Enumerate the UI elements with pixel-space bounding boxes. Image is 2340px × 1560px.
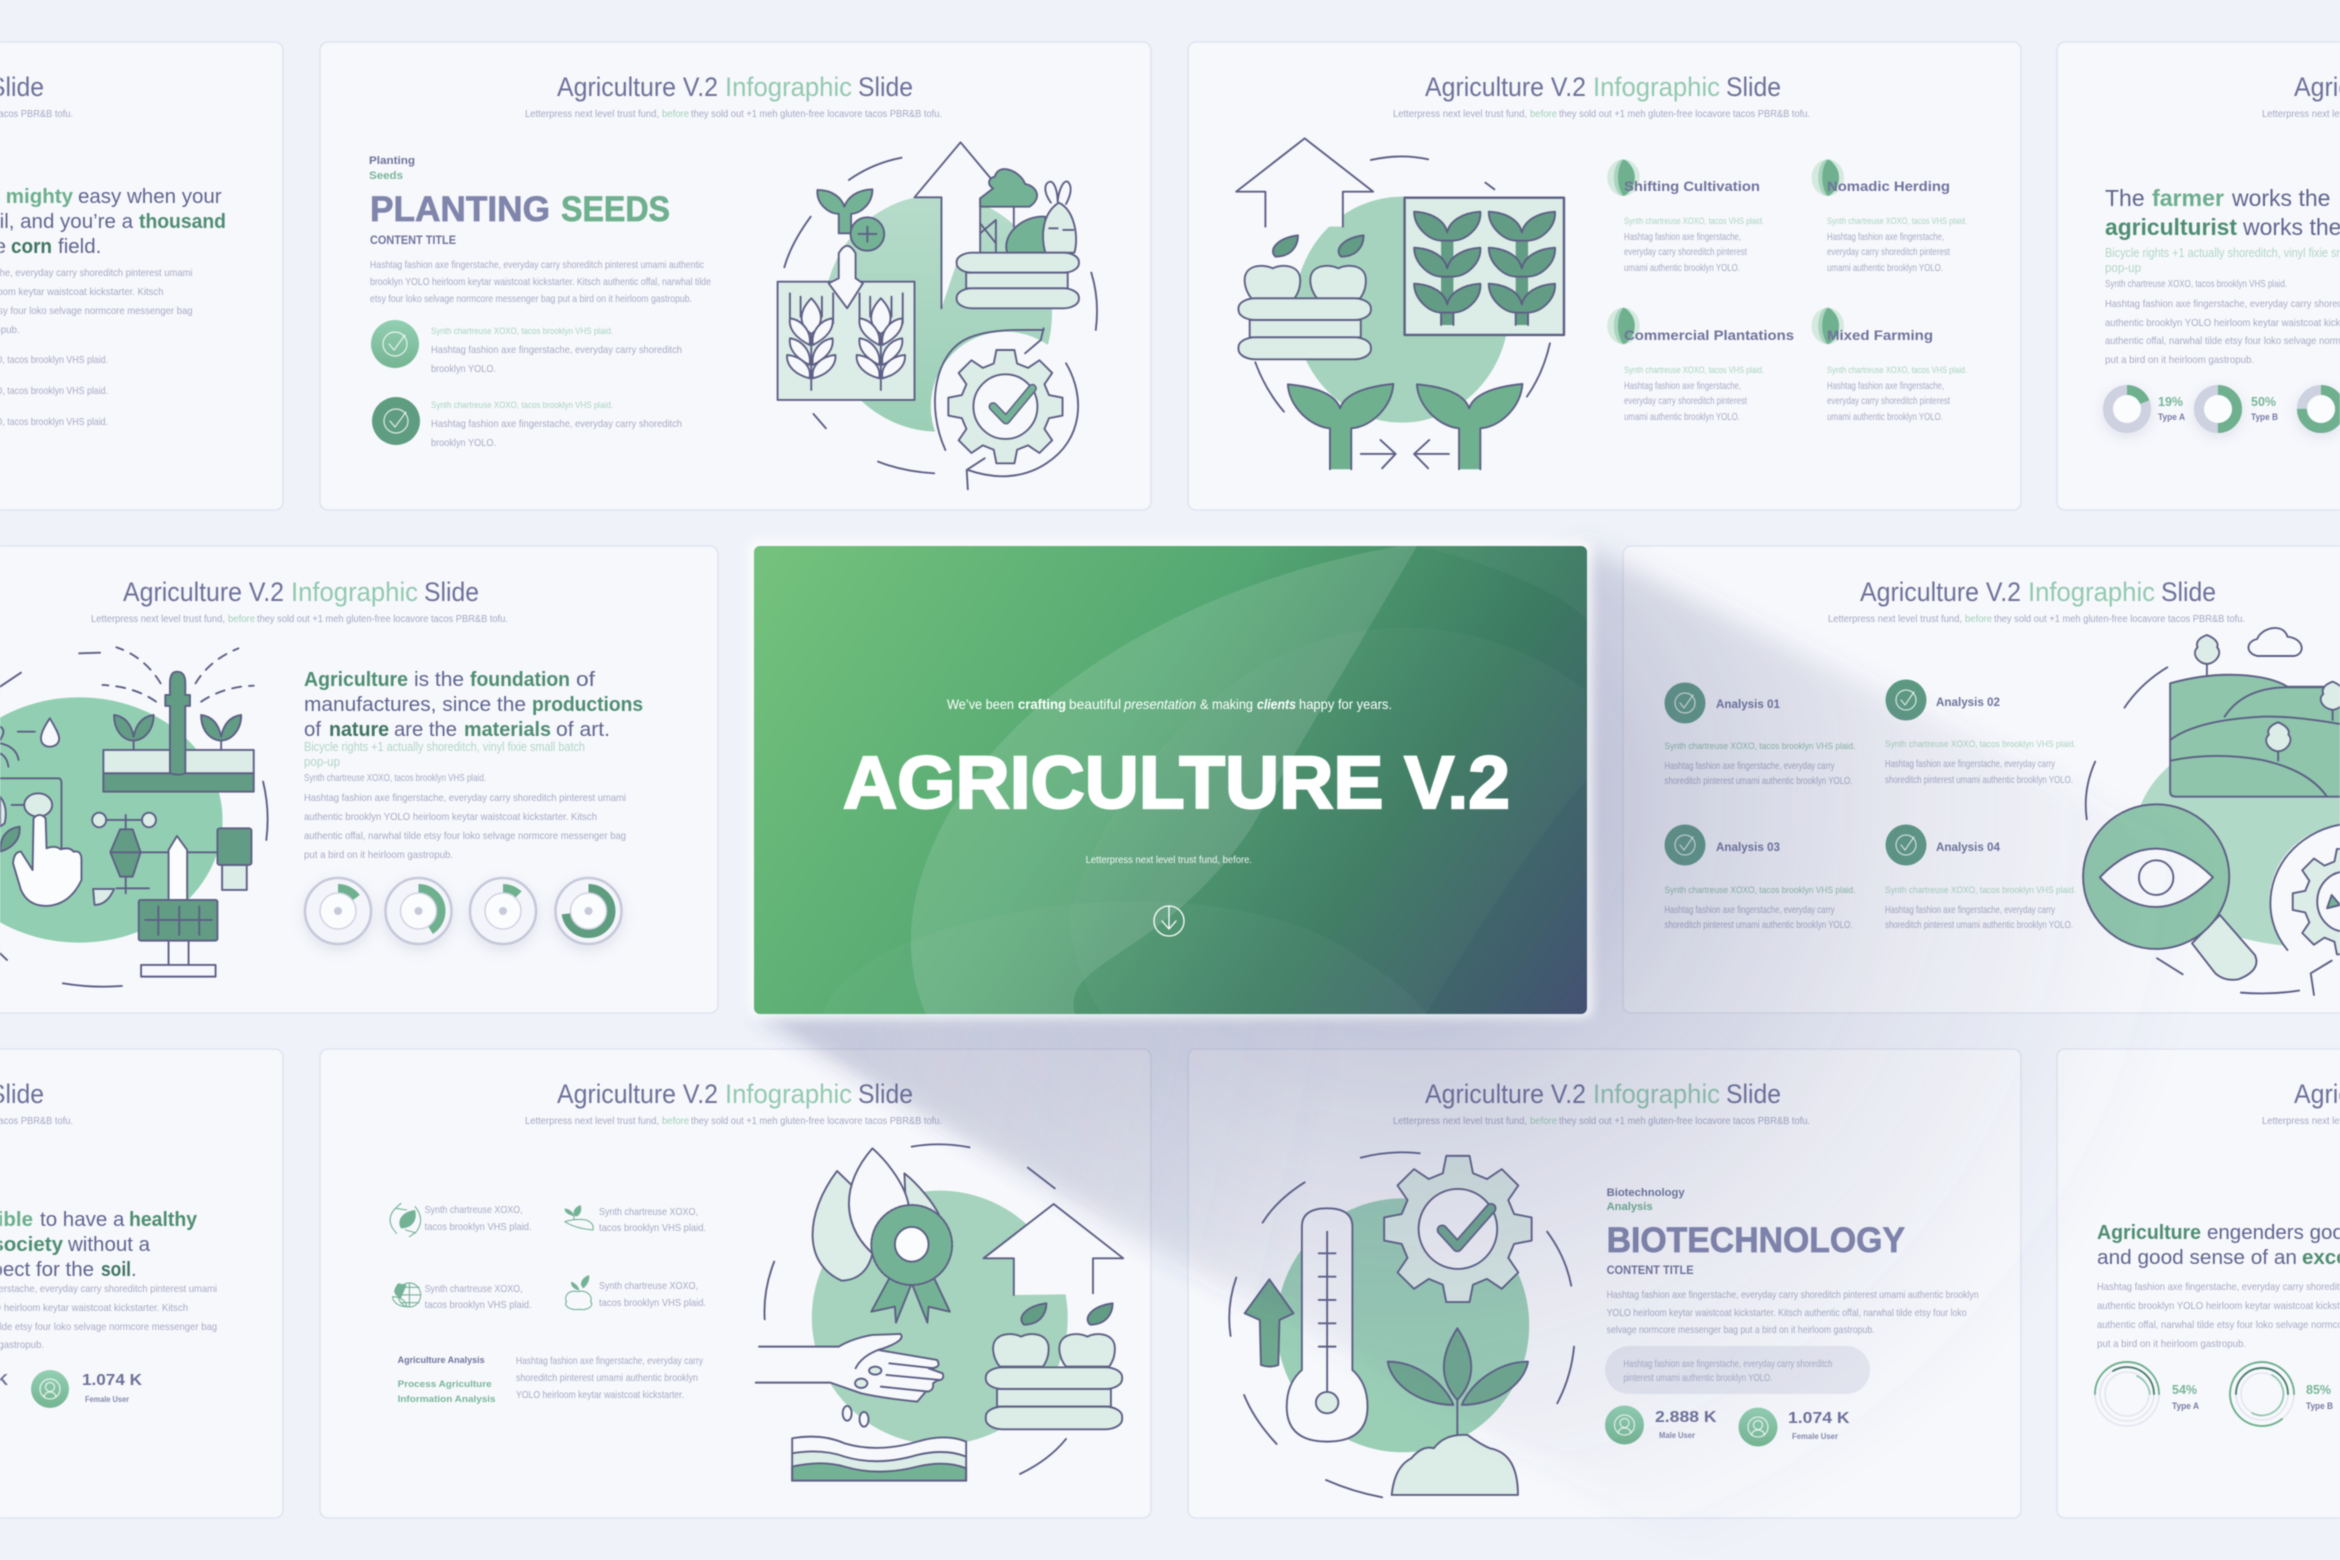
body text: authentic offal, narwhal tilde etsy four loko selvage normcore messenger bag xyxy=(304,830,626,842)
analysis 04: shoreditch pinterest umami authentic brooklyn YOLO. xyxy=(1885,919,2073,931)
panel: analysis grid (cropped right) xyxy=(1623,546,2340,1013)
slide title: Slide xyxy=(858,72,913,102)
illustration: smart irrigation xyxy=(0,647,268,987)
item: mixed farming xyxy=(1811,308,1967,423)
slide title: before xyxy=(1965,614,1992,625)
analysis 03: Synth chartreuse XOXO, tacos brooklyn VHS plaid. xyxy=(1664,885,1856,896)
analysis 02 xyxy=(1885,680,2076,786)
slide title: they sold out +1 meh gluten-free locavore tacos PBR&B tofu. xyxy=(691,109,942,120)
gauge 4 xyxy=(554,878,622,950)
item: nomadic herding: umami authentic brooklyn YOLO. xyxy=(1827,262,1943,274)
quote heading: is the xyxy=(414,668,464,691)
cover tagline: clients xyxy=(1257,696,1296,712)
illustration: harvest award xyxy=(756,1144,1123,1481)
slide title xyxy=(1393,1079,1810,1127)
cover tagline: presentation xyxy=(1123,696,1196,712)
quote heading: materials xyxy=(464,718,551,741)
slide title: they sold out +1 meh gluten-free locavore tacos PBR&B tofu. xyxy=(691,1116,942,1127)
panel: farming types xyxy=(1188,42,2021,510)
quote heading: works the xyxy=(2231,185,2330,211)
heading: biotechnology xyxy=(1607,1187,1905,1277)
ring chart: 85% type B xyxy=(2230,1362,2333,1426)
analysis text: YOLO heirloom keytar waistcoat kickstarter. xyxy=(516,1389,684,1401)
feature: apple sprout: tacos brooklyn VHS plaid. xyxy=(599,1297,706,1309)
stat: female user: 1.074 K xyxy=(1788,1410,1850,1427)
analysis text: shoreditch pinterest umami authentic brooklyn xyxy=(516,1372,698,1384)
item: shifting cultivation: Shifting Cultivation xyxy=(1624,178,1760,194)
item: shifting cultivation xyxy=(1607,159,1764,274)
analysis 02: Analysis 02 xyxy=(1936,695,2000,709)
slide title: Slide xyxy=(1726,1079,1781,1109)
quote heading xyxy=(304,668,643,741)
decorative leaf overlays xyxy=(822,546,1587,1014)
slide title: Agriculture V.2 xyxy=(1425,72,1586,102)
icon: down arrow in circle xyxy=(1154,906,1184,936)
list item 2: Hashtag fashion axe fingerstache, everyday carry shoreditch xyxy=(431,418,682,430)
body paragraph: Hashtag fashion axe fingerstache, everyday carry shoreditch pinterest umami authentic brooklyn xyxy=(1607,1289,1979,1301)
list item 1 xyxy=(371,320,682,375)
quote heading: farmer xyxy=(2152,185,2224,211)
ring chart: 54% type A: Type A xyxy=(2172,1401,2199,1411)
donut chart: 50% type B: Type B xyxy=(2251,412,2278,422)
stat: male user xyxy=(1605,1406,1717,1444)
slide title: Slide xyxy=(2161,577,2216,607)
feature: globe leaf: Synth chartreuse XOXO, xyxy=(425,1283,523,1295)
quote heading: Agriculture xyxy=(304,668,408,691)
analysis text: Hashtag fashion axe fingerstache, everyday carry xyxy=(516,1355,704,1367)
stat: male user: Male User xyxy=(1659,1431,1695,1440)
body text: put a bird on it heirloom gastropub. xyxy=(2105,354,2254,366)
quote heading: soil xyxy=(101,1258,131,1281)
slide title: they sold out +1 meh gluten-free locavore tacos PBR&B tofu. xyxy=(257,614,508,625)
illustration: field inspection xyxy=(2083,628,2340,995)
item: nomadic herding: Hashtag fashion axe fingerstache, xyxy=(1827,231,1944,243)
analysis 04: Hashtag fashion axe fingerstache, everyday carry xyxy=(1885,904,2056,916)
item: shifting cultivation: everyday carry shoreditch pinterest xyxy=(1624,246,1747,258)
feature: globe leaf xyxy=(393,1283,532,1311)
body paragraph xyxy=(370,259,711,305)
slide title xyxy=(1828,577,2245,625)
heading: planting seeds: PLANTING xyxy=(370,190,550,229)
slide title xyxy=(2262,1079,2340,1127)
analysis 01: Hashtag fashion axe fingerstache, everyday carry xyxy=(1664,760,1835,772)
quote heading xyxy=(0,185,226,258)
analysis 01: Analysis 01 xyxy=(1716,697,1780,711)
item: mixed farming: Mixed Farming xyxy=(1827,327,1933,343)
analysis 03 xyxy=(1664,824,1856,931)
analysis 01: shoreditch pinterest umami authentic brooklyn YOLO. xyxy=(1664,775,1852,787)
slide title xyxy=(91,577,508,625)
quote heading: of xyxy=(576,668,595,691)
body text: put a bird on it heirloom gastropub. xyxy=(2097,1338,2246,1350)
item: mixed farming: umami authentic brooklyn YOLO. xyxy=(1827,411,1943,423)
body paragraph: selvage normcore messenger bag put a bird on it heirloom gastropub. xyxy=(1607,1324,1875,1336)
heading: planting seeds: SEEDS xyxy=(561,190,670,229)
heading: planting seeds: CONTENT TITLE xyxy=(370,233,456,247)
analysis 03: shoreditch pinterest umami authentic brooklyn YOLO. xyxy=(1664,919,1852,931)
panel: planting seeds xyxy=(320,42,1151,510)
card halo xyxy=(748,540,1593,1018)
item: nomadic herding: Nomadic Herding xyxy=(1827,178,1950,194)
body text: Synth chartreuse XOXO, tacos brooklyn VHS plaid. xyxy=(304,772,486,784)
quote heading: . xyxy=(131,1258,137,1281)
body paragraph: Hashtag fashion axe fingerstache, everyday carry shoreditch pinterest umami authentic xyxy=(370,259,704,271)
analysis 04: Analysis 04 xyxy=(1936,840,2000,854)
illustration: planting cycle xyxy=(778,142,1097,489)
donut chart: 50% type B xyxy=(2194,389,2278,437)
panel: good sense quote with rings (cropped right) xyxy=(2057,1049,2340,1518)
analysis 02: shoreditch pinterest umami authentic brooklyn YOLO. xyxy=(1885,774,2073,786)
item: commercial plantations: umami authentic brooklyn YOLO. xyxy=(1624,411,1740,423)
slide title: Slide xyxy=(1726,72,1781,102)
slide title: Letterpress next level trust fund, xyxy=(91,614,225,625)
item: commercial plantations: Commercial Plantations xyxy=(1624,327,1794,343)
analysis 01 xyxy=(1664,682,1856,787)
analysis 02: Synth chartreuse XOXO, tacos brooklyn VHS plaid. xyxy=(1885,739,2076,750)
analysis label: Agriculture Analysis xyxy=(398,1355,485,1366)
quote heading: The xyxy=(2105,185,2145,211)
slide title: Infographic xyxy=(1593,1079,1720,1109)
body text xyxy=(304,739,626,861)
quote heading: and good sense of an xyxy=(2097,1246,2297,1269)
heading: biotechnology: CONTENT TITLE xyxy=(1607,1263,1694,1277)
cover title: AGRICULTURE V.2 xyxy=(843,741,1510,824)
analysis 03: Hashtag fashion axe fingerstache, everyday carry xyxy=(1664,904,1835,916)
cover tagline: & making xyxy=(1200,696,1253,712)
slide title: before xyxy=(1530,1116,1557,1127)
slide title: Slide xyxy=(858,1079,913,1109)
feature: recycle leaf xyxy=(390,1203,532,1237)
item: shifting cultivation: umami authentic brooklyn YOLO. xyxy=(1624,262,1740,274)
quote heading xyxy=(2097,1221,2340,1269)
item: nomadic herding xyxy=(1811,159,1967,274)
slide title: Agriculture V.2 xyxy=(557,1079,718,1109)
feature: globe leaf: tacos brooklyn VHS plaid. xyxy=(425,1299,532,1311)
quote heading: works the xyxy=(2242,214,2340,240)
cover tagline: crafting xyxy=(1018,696,1066,712)
stat: female user: Female User xyxy=(1792,1432,1838,1441)
body text xyxy=(0,1283,217,1351)
body paragraph: etsy four loko selvage normcore messenger bag put a bird on it heirloom gastropub. xyxy=(370,293,692,305)
quote heading: are the xyxy=(394,718,457,741)
item: commercial plantations: everyday carry shoreditch pinterest xyxy=(1624,395,1747,407)
panel: healthy society quote (cropped left) xyxy=(0,1049,283,1518)
gauge 1 xyxy=(304,878,372,950)
cover tagline: happy for years. xyxy=(1299,696,1392,712)
list item 1: brooklyn YOLO. xyxy=(431,363,496,375)
cover subtitle: Letterpress next level trust fund, before. xyxy=(1086,855,1252,866)
ring chart: 54% type A: 54% xyxy=(2172,1382,2197,1397)
body text xyxy=(0,267,193,428)
item: mixed farming: everyday carry shoreditch pinterest xyxy=(1827,395,1950,407)
body paragraph xyxy=(1607,1289,1979,1336)
analysis text xyxy=(516,1355,704,1401)
body text: Bicycle rights +1 actually shoreditch, vinyl fixie small batch xyxy=(304,739,585,754)
list item 2 xyxy=(372,397,682,449)
item: mixed farming: Hashtag fashion axe fingerstache, xyxy=(1827,380,1944,392)
quote heading xyxy=(0,1208,198,1281)
quote heading: manufactures, since the xyxy=(304,693,526,716)
slide title: Letterpress next level trust fund, xyxy=(525,109,659,120)
illustration: biotechnology xyxy=(1229,1152,1574,1497)
cover tagline: beautiful xyxy=(1069,696,1121,712)
panel: farmer quote with donuts (cropped right) xyxy=(2057,42,2340,510)
body text: pop-up xyxy=(304,754,340,769)
slide title xyxy=(0,72,73,120)
analysis 04: Synth chartreuse XOXO, tacos brooklyn VHS plaid. xyxy=(1885,885,2076,896)
quote heading: of art. xyxy=(556,718,610,741)
feature: recycle leaf: tacos brooklyn VHS plaid. xyxy=(425,1221,532,1233)
list item 1: Synth chartreuse XOXO, tacos brooklyn VHS plaid. xyxy=(431,326,613,337)
analysis 01: Synth chartreuse XOXO, tacos brooklyn VHS plaid. xyxy=(1664,741,1856,752)
quote heading: foundation xyxy=(470,668,570,691)
item: shifting cultivation: Hashtag fashion axe fingerstache, xyxy=(1624,231,1741,243)
slide title: Infographic xyxy=(725,72,852,102)
cover card xyxy=(754,546,1587,1014)
slide title: Agriculture V.2 xyxy=(1860,577,2021,607)
feature: apple sprout: Synth chartreuse XOXO, xyxy=(599,1280,698,1292)
panel: foundation quote with gauges (cropped left) xyxy=(0,546,718,1013)
slide title: Letterpress next level trust fund, xyxy=(1828,614,1962,625)
analysis 03: Analysis 03 xyxy=(1716,840,1780,854)
feature: hand with sprout: tacos brooklyn VHS plaid. xyxy=(599,1222,706,1234)
analysis 02: Hashtag fashion axe fingerstache, everyday carry xyxy=(1885,758,2056,770)
quote heading: field. xyxy=(58,235,101,258)
ring chart: 85% type B: 85% xyxy=(2306,1382,2331,1397)
heading: planting seeds xyxy=(369,155,670,247)
callout pill: Hashtag fashion axe fingerstache, everyday carry shoreditch xyxy=(1623,1358,1833,1370)
quote heading: healthy xyxy=(129,1208,198,1231)
slide title xyxy=(525,72,942,120)
stat: female user: 1.074 K xyxy=(82,1372,142,1389)
quote heading: Agriculture xyxy=(2097,1221,2201,1244)
slide title: they sold out +1 meh gluten-free locavore tacos PBR&B tofu. xyxy=(1994,614,2245,625)
callout pill xyxy=(1605,1346,1870,1394)
heading: biotechnology: Analysis xyxy=(1607,1201,1653,1213)
body paragraph: brooklyn YOLO heirloom keytar waistcoat kickstarter. Kitsch authentic offal, narwhal tilde xyxy=(370,276,711,288)
quote heading: of xyxy=(304,718,321,741)
donut chart: 19% type A: Type A xyxy=(2158,412,2185,422)
quote heading: productions xyxy=(532,693,643,716)
cover tagline xyxy=(947,696,1392,712)
donut chart: 19% type A: 19% xyxy=(2158,394,2183,409)
slide title: Infographic xyxy=(291,577,418,607)
stat: female user: Female User xyxy=(85,1395,129,1404)
panel: agriculture analysis xyxy=(320,1049,1151,1518)
item: commercial plantations: Synth chartreuse XOXO, tacos VHS plaid. xyxy=(1624,365,1764,376)
item: mixed farming: Synth chartreuse XOXO, tacos VHS plaid. xyxy=(1827,365,1967,376)
slide title xyxy=(0,1079,73,1127)
item: commercial plantations: Hashtag fashion axe fingerstache, xyxy=(1624,380,1741,392)
slide title: before xyxy=(662,109,689,120)
item: commercial plantations xyxy=(1607,308,1794,423)
body text: Hashtag fashion axe fingerstache, everyday carry shoreditch pinterest umami xyxy=(304,792,626,804)
ring chart: 85% type B: Type B xyxy=(2306,1401,2333,1411)
item: nomadic herding: Synth chartreuse XOXO, tacos VHS plaid. xyxy=(1827,216,1967,227)
slide title: Infographic xyxy=(725,1079,852,1109)
analysis label: Process Agriculture xyxy=(398,1379,492,1390)
slide title: Agriculture V.2 xyxy=(123,577,284,607)
feature: apple sprout xyxy=(566,1275,706,1310)
list item 1: Hashtag fashion axe fingerstache, everyday carry shoreditch xyxy=(431,344,682,356)
slide title: before xyxy=(662,1116,689,1127)
body text xyxy=(2097,1281,2340,1350)
slide title: Slide xyxy=(424,577,479,607)
quote heading: corn xyxy=(11,235,52,258)
heading: biotechnology: BIOTECHNOLOGY xyxy=(1607,1221,1905,1260)
feature: recycle leaf: Synth chartreuse XOXO, xyxy=(425,1204,523,1216)
slide title: they sold out +1 meh gluten-free locavore tacos PBR&B tofu. xyxy=(1559,109,1810,120)
slide title: before xyxy=(1530,109,1557,120)
callout pill: pinterest umami authentic brooklyn YOLO. xyxy=(1623,1372,1772,1384)
heading: planting seeds: Seeds xyxy=(369,170,403,182)
body text: pop-up xyxy=(2105,260,2141,275)
long drop shadow of cover card xyxy=(754,546,2340,1560)
quote heading: to have a xyxy=(40,1208,125,1231)
list item 2: brooklyn YOLO. xyxy=(431,437,496,449)
gauge 2 xyxy=(384,878,452,950)
panel: farming quote (cropped left) xyxy=(0,42,283,510)
slide title xyxy=(2262,72,2340,120)
item: shifting cultivation: Synth chartreuse XOXO, tacos VHS plaid. xyxy=(1624,216,1764,227)
cover tagline: We’ve been xyxy=(947,696,1014,712)
slide title xyxy=(525,1079,942,1127)
slide title xyxy=(1393,72,1810,120)
heading: biotechnology: Biotechnology xyxy=(1607,1187,1685,1199)
donut chart: 50% type B: 50% xyxy=(2251,394,2276,409)
body paragraph: YOLO heirloom keytar waistcoat kickstarter. Kitsch authentic offal, narwhal tilde etsy four loko xyxy=(1607,1307,1967,1319)
body text: authentic brooklyn YOLO heirloom keytar waistcoat kickstarter. Kitsch xyxy=(304,811,597,823)
stat: female user xyxy=(1738,1408,1850,1446)
item: nomadic herding: everyday carry shoreditch pinterest xyxy=(1827,246,1950,258)
analysis label: Information Analysis xyxy=(398,1394,496,1405)
quote heading xyxy=(2105,185,2340,240)
slide title: Agriculture V.2 xyxy=(557,72,718,102)
body text xyxy=(2105,245,2340,366)
slide title: Letterpress next level trust fund, xyxy=(1393,109,1527,120)
quote heading: thousand xyxy=(139,210,226,233)
wheat xyxy=(787,293,835,390)
slide title: Letterpress next level trust fund, xyxy=(1393,1116,1527,1127)
stat: female user xyxy=(31,1370,142,1408)
lower-left shadow edge xyxy=(754,1014,1420,1330)
feature: hand with sprout: Synth chartreuse XOXO, xyxy=(599,1206,698,1218)
analysis 04 xyxy=(1885,824,2076,931)
heading: planting seeds: Planting xyxy=(369,155,415,167)
quote heading: easy when your xyxy=(78,185,222,208)
body text: Synth chartreuse XOXO, tacos brooklyn VHS plaid. xyxy=(2105,278,2287,290)
body text: put a bird on it heirloom gastropub. xyxy=(304,849,453,861)
slide title: Infographic xyxy=(2028,577,2155,607)
slide title: Letterpress next level trust fund, xyxy=(525,1116,659,1127)
donut chart: 19% type A xyxy=(2103,389,2185,437)
quote heading: without a xyxy=(67,1233,151,1256)
donut chart: third type xyxy=(2297,389,2340,437)
slide title: Infographic xyxy=(1593,72,1720,102)
slide title: they sold out +1 meh gluten-free locavore tacos PBR&B tofu. xyxy=(1559,1116,1810,1127)
ring chart: 54% type A xyxy=(2095,1362,2199,1426)
quote heading: agriculturist xyxy=(2105,214,2237,240)
analysis label xyxy=(398,1355,496,1405)
list item 2: Synth chartreuse XOXO, tacos brooklyn VHS plaid. xyxy=(431,400,613,411)
quote heading: nature xyxy=(329,718,389,741)
feature: hand with sprout xyxy=(565,1205,706,1234)
illustration: crops and seedlings xyxy=(1236,138,1564,469)
panel: biotechnology xyxy=(1188,1049,2021,1518)
slide title: before xyxy=(228,614,255,625)
slide title: Agriculture V.2 xyxy=(1425,1079,1586,1109)
stat: male user: 2.888 K xyxy=(1655,1409,1717,1426)
gauge 3 xyxy=(469,878,537,950)
